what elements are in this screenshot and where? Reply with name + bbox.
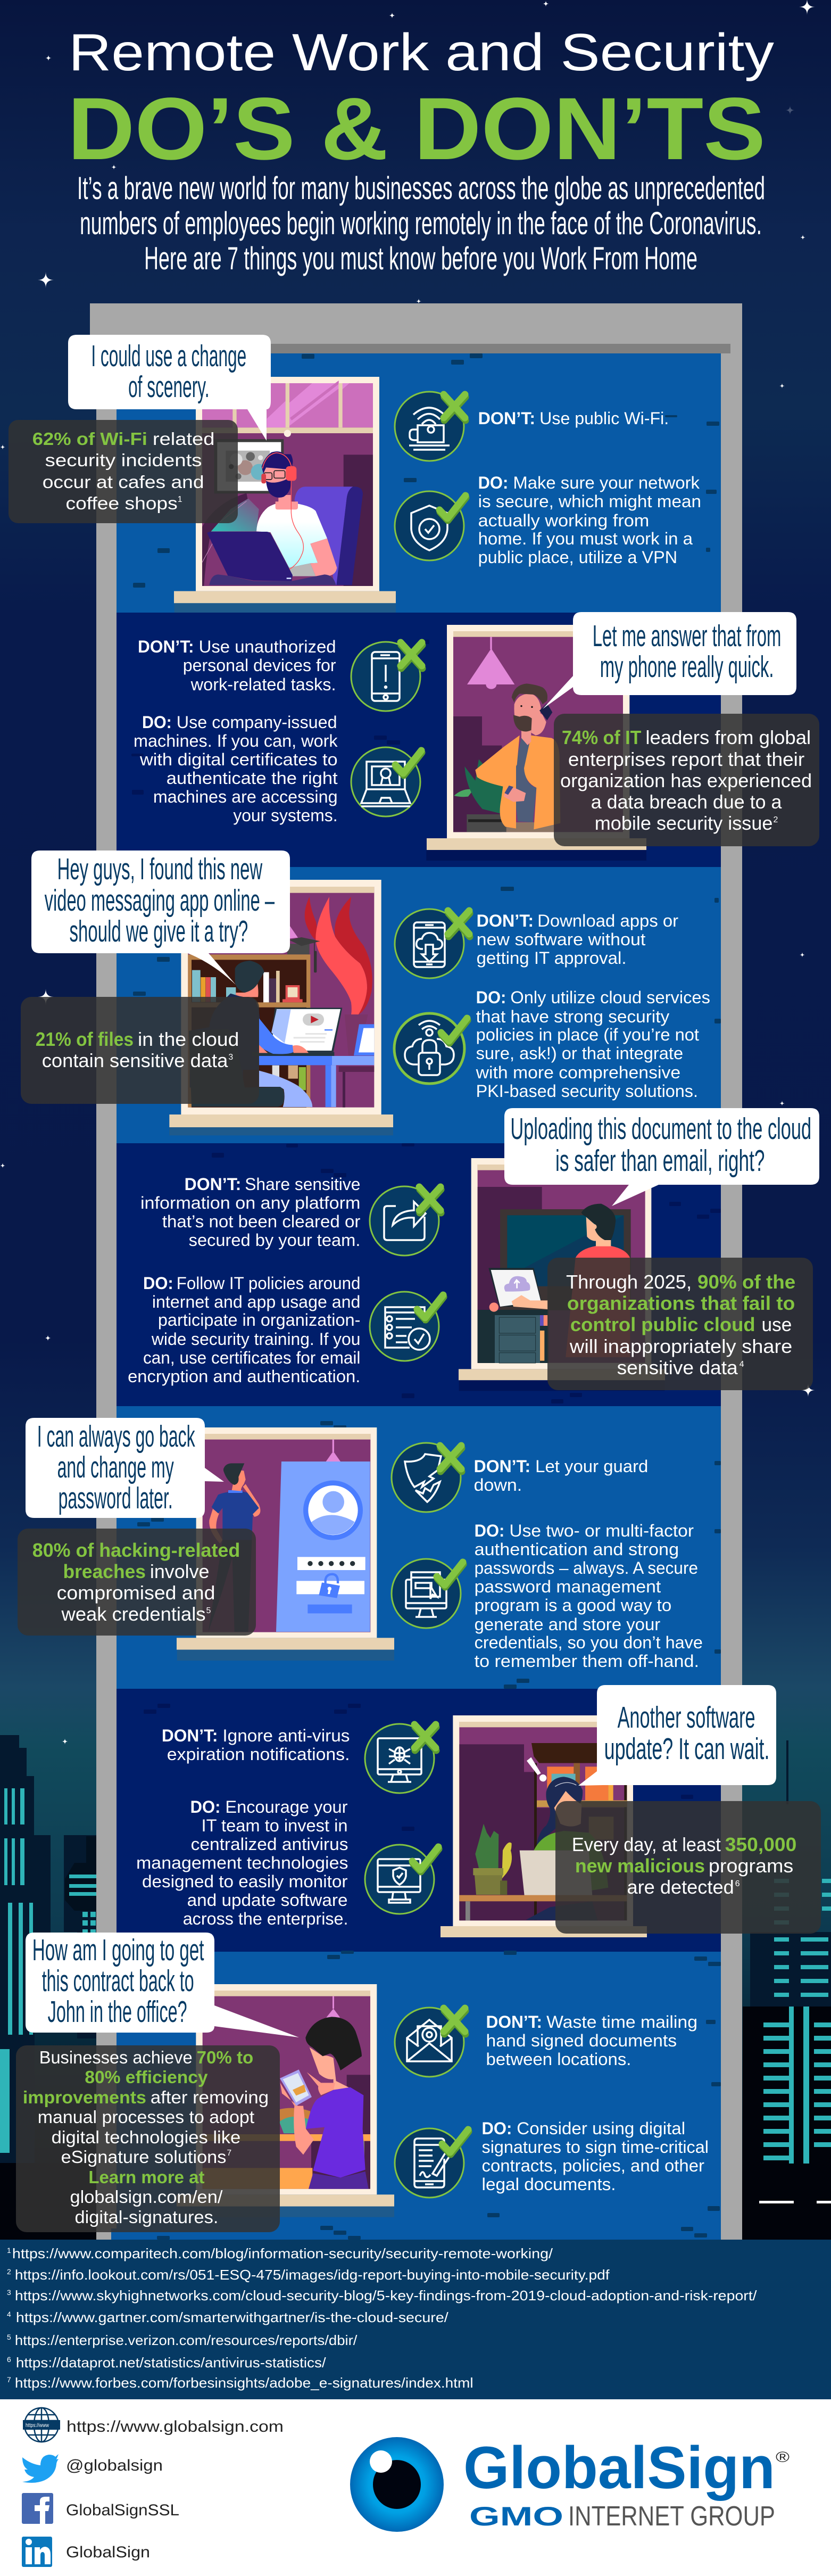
- speech bubble: password later.: [59, 1481, 173, 1515]
- logo: GlobalSign eye: [350, 2437, 444, 2532]
- stat callout: 80% of hacking-related breaches: weak credentials: [61, 1603, 206, 1625]
- do and don't text: authentication and strong: [475, 1540, 679, 1559]
- do and don't text: that have strong security: [476, 1007, 669, 1026]
- stat callout: 74% of IT leaders: a data breach due to a: [591, 791, 782, 813]
- stat callout: 74% of IT leaders: organization has experienced: [560, 770, 812, 791]
- speech bubble: [578, 1685, 776, 1786]
- do and don't text: Download apps or: [537, 911, 679, 930]
- do and don't text: can, use certificates for email: [143, 1348, 360, 1367]
- stat callout: 80% of hacking-related breaches: breaches: [63, 1561, 146, 1582]
- panel background: [117, 1689, 721, 1952]
- stat callout: 70% to 80% efficiency improvements: digital technologies like: [52, 2127, 240, 2147]
- window scene: man at video laptop with bookshelf: [169, 880, 393, 1135]
- do and don't text: Make sure your network: [513, 473, 700, 492]
- logo: GlobalSign wordmark: GlobalSign: [463, 2434, 775, 2501]
- do and don't text: [478, 409, 701, 567]
- stat callout: 70% to 80% efficiency improvements: globalsign.com/en/: [70, 2187, 223, 2207]
- panel 1: public wi-fi: [9, 335, 721, 614]
- stat callout: 70% to 80% efficiency improvements: Learn more at: [88, 2167, 205, 2187]
- do and don't text: down.: [474, 1475, 522, 1495]
- stat callout: 80% of hacking-related breaches: involve: [150, 1561, 209, 1582]
- icon: wi-fi with coffee cup: [395, 392, 466, 461]
- footnotes band: 5: [7, 2333, 11, 2341]
- speech bubble: I could use a change: [91, 339, 246, 373]
- panel background: [117, 1143, 721, 1406]
- do and don't text: DON’T:: [474, 1457, 530, 1476]
- do and don't text: signatures to sign time-critical: [482, 2137, 709, 2157]
- do and don't text: internet and app usage and: [152, 1292, 360, 1311]
- do and don't text: DO:: [190, 1797, 220, 1817]
- do and don't text: [134, 637, 338, 825]
- do and don't text: with digital certificates to: [139, 750, 338, 769]
- panel 5: password guard: [18, 1406, 721, 1689]
- do and don't text: management technologies: [136, 1853, 348, 1872]
- stat callout: 21% of files: 21% of files: [36, 1028, 134, 1050]
- do and don't text: [136, 1726, 350, 1928]
- do and don't text: Use two- or multi-factor: [509, 1521, 694, 1540]
- do and don't text: Let your guard: [535, 1457, 648, 1476]
- do and don't text: DO:: [482, 2119, 512, 2138]
- panel background: [117, 613, 721, 867]
- do and don't text: PKI-based security solutions.: [476, 1081, 698, 1101]
- stat callout: 70% to 80% efficiency improvements: 7: [227, 2149, 231, 2158]
- logo: GlobalSign wordmark: INTERNET GROUP: [568, 2501, 775, 2532]
- panel 4: sharing sensitive information: [117, 1108, 819, 1406]
- icon: checklist: [370, 1292, 444, 1361]
- panel 6: antivirus: [117, 1685, 821, 1952]
- stat callout: 21% of files: [21, 997, 259, 1104]
- do and don't text: designed to easily monitor: [142, 1872, 348, 1891]
- stat callout: 70% to 80% efficiency improvements: [16, 2045, 280, 2232]
- footnotes band: 2: [7, 2267, 11, 2276]
- speech bubble: [31, 851, 290, 985]
- do and don't text: DON’T:: [486, 2012, 542, 2032]
- panel 7: digital signatures: [16, 1933, 721, 2240]
- speech bubble: I can always go back: [37, 1419, 195, 1454]
- speech bubble: How am I going to get: [32, 1933, 204, 1967]
- stat callout: 74% of IT leaders: enterprises report that their: [568, 748, 804, 770]
- stat callout: 350,000 malicious programs: new malicious: [575, 1855, 705, 1877]
- do and don't text: credentials, so you don’t have: [475, 1633, 703, 1652]
- footnotes band: 1: [7, 2246, 11, 2255]
- do and don't text: DO:: [142, 713, 172, 732]
- do and don't text: DON’T:: [138, 637, 194, 656]
- do and don't text: machines. If you can, work: [134, 731, 338, 750]
- do and don't text: generate and store your: [475, 1615, 661, 1634]
- speech bubble: [504, 1108, 819, 1206]
- do and don't text: legal documents.: [482, 2175, 616, 2194]
- icon: shield with check: [395, 491, 466, 560]
- icon: linkedin: [22, 2537, 52, 2567]
- do and don't text: [128, 1175, 361, 1386]
- twitter handle: @globalsign: [66, 2457, 163, 2474]
- do and don't text: DO:: [143, 1274, 173, 1293]
- stat callout: 90% of the organizations: 90% of the: [697, 1271, 795, 1293]
- icon: globe: https://www: [26, 2423, 49, 2429]
- bricks: [144, 1704, 693, 1831]
- window scene: man looking at login screen: [177, 1427, 394, 1661]
- footnotes band: https://www.forbes.com/forbesinsights/adobe_e-signatures/index.html: [15, 2376, 473, 2391]
- do and don't text: Follow IT policies around: [177, 1274, 360, 1293]
- do and don't text: work-related tasks.: [190, 675, 336, 694]
- icon: globe: [23, 2408, 60, 2442]
- do and don't text: between locations.: [486, 2050, 631, 2069]
- speech bubble: this contract back to: [42, 1964, 194, 1998]
- icon: monitor with shield: [365, 1845, 439, 1914]
- stat callout: 90% of the organizations: organizations that fail to: [567, 1292, 795, 1314]
- do and don't text: Share sensitive: [245, 1175, 360, 1194]
- stat callout: 90% of the organizations: [547, 1258, 813, 1390]
- do and don't text: secured by your team.: [189, 1231, 360, 1250]
- do and don't text: and update software: [187, 1890, 348, 1910]
- facebook name: GlobalSignSSL: [66, 2501, 179, 2519]
- panel background: [111, 1952, 721, 2240]
- do and don't text: is secure, which might mean: [478, 492, 701, 511]
- stat callout: 90% of the organizations: control public cloud: [570, 1314, 755, 1335]
- footnotes band: [0, 2240, 831, 2399]
- do and don't text: [482, 2012, 709, 2194]
- city skyline left: [0, 1735, 111, 2240]
- do and don't text: Ignore anti-virus: [222, 1726, 350, 1745]
- do and don't text: that’s not been cleared or: [162, 1212, 361, 1231]
- stat callout: 21% of files: 3: [228, 1053, 233, 1062]
- city skyline right: [743, 1740, 831, 2240]
- stat callout: 74% of IT leaders: mobile security issue: [595, 812, 772, 834]
- do and don't text: machines are accessing: [153, 787, 338, 806]
- stat callout: 62% of Wi-Fi: 62% of Wi-Fi: [32, 429, 147, 449]
- do and don't text: contracts, policies, and other: [482, 2156, 704, 2175]
- speech bubble: of scenery.: [128, 370, 209, 404]
- stat callout: 80% of hacking-related breaches: [18, 1529, 256, 1636]
- panel 3: downloading apps: [21, 851, 721, 1143]
- stat callout: 90% of the organizations: use: [762, 1314, 792, 1335]
- stat callout: 74% of IT leaders: 2: [773, 815, 778, 824]
- do and don't text: Only utilize cloud services: [510, 988, 710, 1007]
- do and don't text: Use unauthorized: [199, 637, 336, 656]
- window scene: man with laptop and headphones: [174, 377, 396, 614]
- icon: phone with signature pen: [395, 2128, 469, 2198]
- stat callout: 74% of IT leaders: leaders from global: [645, 726, 811, 748]
- do and don't text: DON’T:: [162, 1726, 218, 1745]
- do and don't text: wide security training. If you: [151, 1330, 360, 1349]
- speech bubble: video messaging app online –: [45, 884, 275, 918]
- panel background: [117, 353, 721, 613]
- do and don't text: Use company-issued: [177, 713, 337, 732]
- do and don't text: with more comprehensive: [476, 1063, 680, 1082]
- footnotes band: https://www.gartner.com/smarterwithgartner/is-the-cloud-secure/: [16, 2310, 449, 2325]
- stat callout: 70% to 80% efficiency improvements: 70% to: [197, 2047, 253, 2067]
- do and don't text: Use public Wi-Fi.: [539, 409, 669, 428]
- do and don't text: participate in organization-: [158, 1310, 360, 1330]
- icon: envelope with at sign: [395, 2008, 466, 2077]
- footnotes band: https://www.skyhighnetworks.com/cloud-security-blog/5-key-findings-from-2019-cloud-adoption-and-risk-report/: [15, 2289, 757, 2303]
- stat callout: 74% of IT leaders: 74% of IT: [562, 726, 641, 748]
- footnotes band: 7: [7, 2375, 11, 2384]
- do and don't text: encryption and authentication.: [128, 1367, 360, 1386]
- website link: https://www.globalsign.com: [67, 2418, 284, 2435]
- panel background: [117, 867, 721, 1143]
- bricks: [137, 1421, 721, 1689]
- stat callout: 62% of Wi-Fi: [9, 420, 238, 523]
- stat callout: 70% to 80% efficiency improvements: improvements: [23, 2087, 146, 2107]
- stat callout: 90% of the organizations: Through 2025,: [566, 1271, 692, 1293]
- speech bubble: [68, 335, 271, 441]
- bricks: [157, 1951, 721, 2240]
- do and don't text: public place, utilize a VPN: [478, 548, 677, 567]
- do and don't text: passwords – always. A secure: [475, 1558, 698, 1578]
- logo: GlobalSign wordmark: ®: [776, 2449, 790, 2465]
- bricks: [212, 1143, 721, 1403]
- icon: broken shield: [392, 1443, 462, 1512]
- speech bubble: [26, 1418, 224, 1518]
- do and don't text: sure, ask!) or that integrate: [476, 1044, 683, 1063]
- do and don't text: hand signed documents: [486, 2031, 677, 2050]
- do and don't text: [476, 911, 710, 1101]
- do and don't text: DO:: [478, 473, 508, 492]
- icon: facebook: [22, 2493, 53, 2524]
- window scene: man on phone: [426, 625, 646, 861]
- do and don't text: information on any platform: [140, 1193, 360, 1212]
- do and don't text: Consider using digital: [517, 2119, 685, 2138]
- do and don't text: actually working from: [478, 511, 649, 530]
- footnotes band: https://dataprot.net/statistics/antivirus-statistics/: [16, 2356, 327, 2371]
- stat callout: 70% to 80% efficiency improvements: eSignature solutions: [61, 2147, 226, 2167]
- speech bubble: [26, 1933, 299, 2037]
- speech bubble: [543, 612, 796, 709]
- icon: monitor with password: [392, 1559, 463, 1628]
- footnotes band: 6: [7, 2355, 11, 2364]
- stat callout: 80% of hacking-related breaches: 80% of hacking-related: [32, 1539, 240, 1561]
- stat callout: 350,000 malicious programs: 350,000: [725, 1834, 796, 1855]
- stat callout: 70% to 80% efficiency improvements: Businesses achieve: [39, 2047, 193, 2067]
- do and don't text: Encourage your: [225, 1797, 348, 1817]
- do and don't text: personal devices for: [183, 656, 336, 675]
- footnotes band: 3: [7, 2288, 11, 2297]
- do and don't text: getting IT approval.: [477, 948, 627, 968]
- stat callout: 74% of IT leaders: [554, 714, 819, 846]
- footnotes band: 4: [7, 2310, 11, 2318]
- footnotes band: https://www.comparitech.com/blog/information-security/security-remote-working/: [12, 2247, 553, 2261]
- do and don't text: to remember them off-hand.: [475, 1652, 699, 1671]
- speech bubble: and change my: [57, 1450, 174, 1484]
- speech bubble: John in the office?: [48, 1995, 187, 2029]
- do and don't text: password management: [475, 1577, 661, 1596]
- stat callout: 90% of the organizations: sensitive data: [617, 1357, 738, 1378]
- panel background: [117, 1406, 721, 1689]
- left wall: [96, 1952, 117, 2228]
- icon: share arrow: [370, 1186, 441, 1256]
- footer: [0, 2399, 831, 2576]
- stat callout: 90% of the organizations: will inappropriately share: [569, 1335, 792, 1357]
- do and don't text: your systems.: [233, 806, 338, 825]
- stat callout: 70% to 80% efficiency improvements: digital-signatures.: [74, 2207, 218, 2227]
- logo: GlobalSign wordmark: [463, 2434, 790, 2532]
- do and don't text: program is a good way to: [475, 1596, 671, 1615]
- do and don't text: new software without: [477, 930, 646, 949]
- icon: cloud lock: [394, 1013, 468, 1084]
- do and don't text: IT team to invest in: [202, 1816, 348, 1835]
- bricks: [133, 353, 719, 588]
- building facade: [90, 303, 742, 2240]
- do and don't text: across the enterprise.: [183, 1909, 348, 1928]
- stat callout: 21% of files: in the cloud: [138, 1028, 239, 1050]
- title: Remote Work and Security: Remote Work and Security: [69, 23, 774, 81]
- icon: phone with cloud download: [395, 909, 470, 978]
- icon: laptop with certificate: [351, 747, 422, 816]
- bricks: [131, 640, 429, 795]
- do and don't text: DON’T:: [478, 409, 535, 428]
- speech bubble: should we give it a try?: [70, 914, 248, 948]
- footnotes band: https://info.lookout.com/rs/051-ESQ-475/images/idg-report-buying-into-mobile-security.pdf: [15, 2268, 610, 2283]
- do and don't text: policies in place (if you’re not: [476, 1025, 699, 1044]
- do and don't text: [474, 1457, 703, 1671]
- window scene: woman at desk with plant: [441, 1715, 647, 1937]
- stat callout: 62% of Wi-Fi: security incidents: [45, 450, 202, 470]
- stat callout: 62% of Wi-Fi: coffee shops: [66, 493, 178, 513]
- intro text: [77, 170, 765, 276]
- do and don't text: DO:: [475, 1521, 504, 1540]
- do and don't text: DO:: [476, 988, 506, 1007]
- stat callout: 70% to 80% efficiency improvements: after removing: [151, 2087, 269, 2107]
- footnotes band: https://enterprise.verizon.com/resources/reports/dbir/: [15, 2333, 358, 2348]
- stat callout: 350,000 malicious programs: are detected: [627, 1876, 734, 1898]
- stat callout: 350,000 malicious programs: [555, 1801, 821, 1934]
- stat callout: 62% of Wi-Fi: occur at cafes and: [43, 472, 204, 492]
- do and don't text: DON’T:: [185, 1175, 241, 1194]
- footer background: [0, 2399, 831, 2576]
- stat callout: 70% to 80% efficiency improvements: 80% efficiency: [85, 2067, 208, 2087]
- stat callout: 70% to 80% efficiency improvements: manual processes to adopt: [38, 2107, 254, 2127]
- icon: twitter bird: [22, 2454, 59, 2483]
- icon: monitor with bug: [365, 1724, 436, 1793]
- window scene: woman reading phone: [177, 1984, 394, 2217]
- stat callout: 80% of hacking-related breaches: compromised and: [57, 1582, 215, 1604]
- do and don't text: authenticate the right: [167, 769, 338, 788]
- stat callout: 350,000 malicious programs: Every day, at least: [572, 1834, 721, 1855]
- logo: GlobalSign wordmark: GMO: [469, 2501, 563, 2531]
- stars: [0, 0, 815, 1745]
- stat callout: 21% of files: contain sensitive data: [42, 1050, 228, 1071]
- do and don't text: DON’T:: [477, 911, 534, 930]
- linkedin name: GlobalSign: [66, 2544, 150, 2561]
- speech bubble: Hey guys, I found this new: [57, 852, 263, 886]
- panel 2: personal devices: [117, 612, 819, 867]
- stat callout: 62% of Wi-Fi: related: [153, 429, 214, 449]
- do and don't text: expiration notifications.: [167, 1745, 350, 1764]
- do and don't text: Waste time mailing: [546, 2012, 697, 2032]
- window scene: man at monitor uploading to cloud: [459, 1158, 665, 1391]
- icon: phone with warning: [351, 642, 422, 711]
- do and don't text: centralized antivirus: [191, 1835, 348, 1854]
- do and don't text: home. If you must work in a: [478, 529, 693, 548]
- title: DO'S & DON'TS: DO’S & DON’TS: [68, 80, 766, 178]
- stat callout: 62% of Wi-Fi: 1: [178, 495, 182, 504]
- bricks: [133, 887, 721, 1023]
- stat callout: 80% of hacking-related breaches: 5: [206, 1606, 211, 1615]
- stat callout: 350,000 malicious programs: programs: [709, 1855, 793, 1877]
- stat callout: 90% of the organizations: 4: [739, 1360, 744, 1369]
- stat callout: 350,000 malicious programs: 6: [735, 1879, 740, 1888]
